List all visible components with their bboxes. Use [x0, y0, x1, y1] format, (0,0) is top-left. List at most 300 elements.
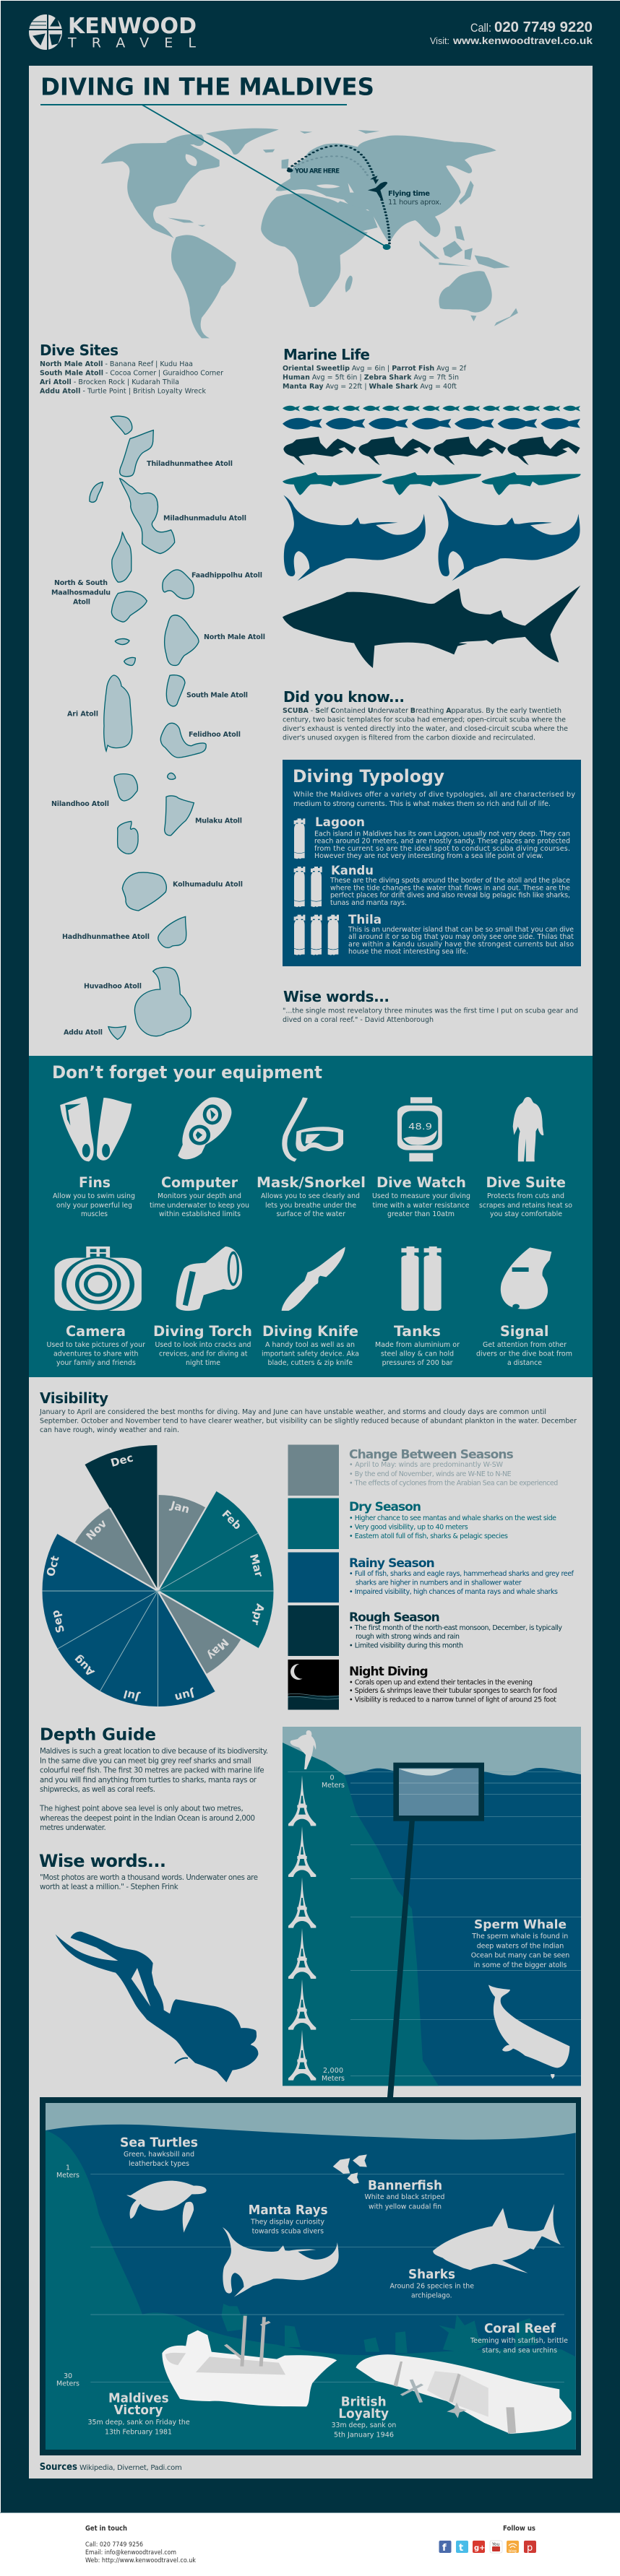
footer contact: Web: http://www.kenwoodtravel.co.uk — [85, 2557, 196, 2564]
map land masses — [101, 129, 518, 338]
label: bannerfish — [364, 2178, 445, 2211]
marine life size list — [283, 365, 467, 391]
legend: rough season — [288, 1605, 562, 1656]
footer contact: Call: 020 7749 9256 — [85, 2541, 143, 2549]
icon: logo globe — [29, 14, 62, 50]
item: diving knife — [262, 1323, 359, 1367]
label: sharks: archipelago. — [411, 2292, 452, 2299]
lagoon — [314, 815, 570, 860]
month labels: Nov — [84, 1517, 110, 1543]
icon: pinterest: p — [527, 2543, 533, 2554]
item: diving knife: Diving Knife — [262, 1323, 358, 1340]
item: dive suite — [479, 1174, 572, 1218]
heading: dive sites: Dive Sites — [40, 342, 119, 359]
label: manta rays: towards scuba divers — [252, 2227, 324, 2236]
atoll labels: Felidhoo Atoll — [189, 731, 241, 739]
item: dive suite: scrapes and retains heat so — [479, 1202, 572, 1210]
icon: knife — [282, 1247, 345, 1311]
thila: all around it or so big that you may only see one side. Thilas that — [348, 933, 574, 941]
lagoon: Lagoon — [315, 815, 365, 829]
zoom window — [393, 1763, 484, 1821]
Ari atoll shape — [104, 675, 132, 751]
row: oriental sweetlip — [283, 406, 580, 412]
footer social: Follow us — [503, 2525, 535, 2533]
coral silhouettes — [221, 2304, 538, 2353]
month labels: Jul — [122, 1687, 141, 1704]
label: British Loyalty: 5th January 1946 — [334, 2431, 394, 2440]
month labels: Sep — [48, 1608, 67, 1634]
item: diving torch: Diving Torch — [153, 1323, 252, 1340]
item: signal: Get attention from other — [483, 1341, 567, 1349]
1 meter label: Meters — [56, 2172, 79, 2180]
depth guide text: shipwrecks, as well as coral reefs. — [40, 1786, 155, 1794]
month labels: Feb — [219, 1507, 244, 1532]
logo subword: TRAVEL — [67, 35, 196, 51]
dive site list — [40, 360, 223, 396]
title: DIVING IN THE MALDIVES — [40, 72, 374, 101]
pointer line to Maldives — [142, 105, 391, 250]
legend: dry season: • Higher chance to see mantas and whale sharks on the west side — [349, 1514, 556, 1522]
item: tanks: pressures of 200 bar — [382, 1359, 453, 1367]
atoll labels: South Male Atoll — [186, 692, 248, 699]
heading: did you know: Did you know... — [283, 688, 405, 706]
atoll labels: Huvadhoo Atoll — [84, 982, 142, 991]
label: British Loyalty: Loyalty — [338, 2406, 389, 2421]
label: coral reef: stars, and sea urchins — [482, 2347, 557, 2354]
zoom connector stem — [387, 1820, 415, 2097]
item: computer: Computer — [161, 1174, 238, 1191]
30 meters label: 30 — [64, 2372, 72, 2380]
kandu — [330, 864, 570, 907]
map label: flying time: 11 hours aprox. — [388, 199, 442, 207]
month labels: Mar — [247, 1553, 266, 1579]
icon: dive watch — [397, 1097, 442, 1161]
2000 meters label: 2,000 — [323, 2067, 343, 2075]
typology intro — [293, 791, 575, 808]
seabed slope — [283, 1743, 439, 2086]
30 meters label — [56, 2372, 79, 2388]
legend: change between seasons: • April to May: winds are predominantly W-SW — [349, 1461, 504, 1469]
item: signal: divers or the dive boat from — [476, 1350, 572, 1358]
item: camera — [46, 1323, 145, 1367]
logo wordmark: KENWOOD — [68, 14, 197, 39]
atoll labels: Mulaku Atoll — [195, 818, 242, 825]
item: mask and snorkel: Mask/Snorkel — [257, 1174, 366, 1191]
depth guide text: whereas the deepest point in the Indian Ocean is around 2,000 — [40, 1815, 255, 1823]
panel: equipment — [29, 1056, 593, 1377]
kandu: These are the diving spots around the border of the atoll and the place — [330, 877, 570, 885]
month labels: May — [204, 1636, 231, 1662]
row: zebra sharks — [283, 472, 581, 495]
item: fins: Fins — [79, 1174, 111, 1191]
legend: change between seasons — [288, 1444, 558, 1496]
quote: Attenborough — [283, 1007, 578, 1024]
pie dividers — [58, 1444, 258, 1691]
label: Maldives Victory: 35m deep, sank on Friday the — [88, 2419, 190, 2427]
depth guide text: Maldives is such a great location to dive because of its biodiversity. — [40, 1748, 268, 1756]
contact website: www.kenwoodtravel.co.uk — [452, 35, 593, 46]
did you know text: century, two basic templates for scuba had emerged; open-circuit scuba where the — [283, 716, 566, 724]
item: computer: within established limits — [159, 1210, 241, 1218]
item: tanks: Tanks — [394, 1323, 441, 1340]
quote: Frink: "Most photos are worth a thousand words. Underwater ones are — [40, 1874, 258, 1882]
item: mask and snorkel — [257, 1174, 366, 1218]
legend: night diving: Night Diving — [349, 1665, 429, 1679]
kandu: perfect places for drift dives and also reveal big pelagic fish like sharks, — [330, 891, 570, 900]
item: mask and snorkel: lets you breathe under the — [265, 1202, 356, 1210]
flight path — [288, 146, 389, 243]
item: dive suite: you stay comfortable — [490, 1210, 562, 1218]
large diver silhouette — [56, 1932, 258, 2082]
heading: wise words: Wise words... — [283, 988, 389, 1005]
bannerfish — [333, 2154, 367, 2184]
contact phone: Call: — [470, 21, 491, 35]
1 meter label: 1 — [66, 2164, 70, 2172]
thila: are within a Kandu usually have the strongest currents but also — [348, 940, 574, 949]
legend: night diving — [288, 1660, 557, 1710]
legend: rainy season: sharks are higher in numbers and in shallower water — [356, 1579, 522, 1587]
marine life size list: Oriental Sweetlip Avg = 6in | Parrot Fish Avg = 2f — [283, 365, 467, 373]
legend: change between seasons: • The effects of cyclones from the Arabian Sea can be experienced — [349, 1479, 558, 1488]
legend: night diving: • Visibility is reduced to a narrow tunnel of light of around 25 foot — [349, 1696, 556, 1704]
icon: camera — [55, 1246, 142, 1312]
label: British Loyalty: 33m deep, sank on — [332, 2421, 396, 2429]
month labels: Apr — [249, 1603, 267, 1627]
30 meters label: Meters — [56, 2380, 79, 2388]
sperm whale text — [471, 1918, 569, 1969]
label: bannerfish: with yellow caudal fin — [369, 2203, 442, 2211]
lagoon: However they are not very interesting from a sea life point of view. — [314, 852, 543, 860]
sky — [283, 1727, 581, 2086]
zero meters label: 0 — [330, 1774, 335, 1782]
eiffel towers — [288, 1775, 316, 2081]
atoll labels: Kolhumadulu Atoll — [173, 881, 243, 888]
lagoon: reach around 20 meters, and are mostly sandy. These places are protected — [314, 838, 570, 845]
title underline — [40, 104, 347, 105]
seabed — [46, 2130, 576, 2450]
label: sharks — [390, 2267, 474, 2299]
label: manta rays: They display curiosity — [250, 2219, 324, 2226]
visibility text: September. October and November tend to have clearer weather, but visibility can be slightly reduced because of abundant plankton in the water. December — [40, 1417, 577, 1426]
legend: dry season: • Very good visibility, up to 40 meters — [349, 1524, 468, 1531]
did you know text — [283, 707, 568, 742]
icon: torch — [176, 1246, 242, 1311]
sperm whale text: Sperm Whale — [474, 1918, 567, 1933]
scale lines — [90, 2174, 564, 2382]
icon: facebook: f — [442, 2543, 447, 2554]
panel: diving typology — [283, 760, 581, 966]
atoll labels: North & South — [54, 579, 108, 587]
label: British Loyalty: British — [341, 2395, 387, 2410]
kandu: Kandu — [331, 864, 374, 877]
footer contact: Get in touch — [85, 2525, 127, 2533]
item: signal: Signal — [500, 1323, 549, 1340]
quote: Attenborough: dived on a coral reef." - David Attenborough — [283, 1016, 434, 1024]
header — [29, 14, 593, 51]
label: sea turtles — [120, 2135, 198, 2168]
atoll shapes south — [108, 723, 206, 1039]
item: diving torch: night time — [186, 1359, 220, 1367]
item: dive watch: Dive Watch — [376, 1174, 466, 1191]
footer — [0, 2512, 620, 2564]
dive site list: Ari Atoll - Brocken Rock | Kudarah Thila — [40, 378, 179, 386]
legend: dry season — [288, 1498, 556, 1549]
item: diving torch: Used to look into cracks and — [155, 1341, 251, 1349]
icon: tanks — [401, 1246, 442, 1311]
depth guide text: In the same dive you can meet big grey reef sharks and small — [40, 1758, 251, 1765]
item: dive watch — [372, 1174, 470, 1218]
1 meter label — [56, 2164, 79, 2180]
depth guide text: colourful reef fish. The first 30 metres are packed with marine life — [40, 1766, 264, 1775]
month labels: Dec — [109, 1451, 134, 1470]
map label: flying time: Flying time — [388, 190, 430, 198]
sperm whale — [488, 1985, 569, 2068]
2000 meters label — [322, 2067, 345, 2083]
wreck: Maldives Victory — [162, 2316, 337, 2406]
label: British Loyalty — [332, 2395, 396, 2440]
visibility text: can have rough, windy weather and rain. — [40, 1426, 179, 1434]
manta ray silhouette — [223, 2227, 339, 2297]
label: Maldives Victory: Victory — [114, 2403, 163, 2418]
label: coral reef — [470, 2321, 568, 2354]
world map — [101, 105, 518, 338]
heading: visibility: Visibility — [40, 1389, 108, 1407]
depth guide text — [39, 1748, 268, 1832]
label: manta rays — [249, 2203, 328, 2236]
row: parrot fish — [283, 418, 580, 430]
map label: flying time — [388, 190, 442, 207]
item: signal: a distance — [507, 1359, 542, 1367]
legend: rough season: • Limited visibility during this month — [349, 1642, 463, 1649]
month labels: Jun — [173, 1686, 197, 1704]
depth guide text: metres underwater. — [40, 1824, 106, 1832]
inland seas — [186, 154, 354, 193]
label: Maldives Victory: Maldives — [108, 2391, 169, 2406]
sperm whale text: deep waters of the Indian — [477, 1943, 564, 1950]
visibility text: January to April are considered the best months for diving. May and June can have unstable weather, and storms and cloudy days are common until — [39, 1408, 546, 1416]
atoll labels: Maalhosmadulu — [51, 589, 111, 597]
map label: you are here: YOU ARE HERE — [294, 168, 340, 175]
legend: rainy season: • Full of fish, sharks and eagle rays, hammerhead sharks and grey reef — [349, 1570, 574, 1578]
2000 meters label: Meters — [322, 2075, 345, 2083]
atoll labels: Ari Atoll — [67, 711, 98, 718]
item: dive suite: Dive Suite — [486, 1174, 566, 1191]
lagoon: from the current so are the ideal spot to conduct scuba diving courses. — [314, 845, 570, 853]
thila: This is an underwater island that can be so small that you can dive — [348, 926, 574, 934]
label: manta rays: Manta Rays — [249, 2203, 328, 2218]
heading: marine life: Marine Life — [283, 346, 370, 363]
pie sectors — [42, 1445, 273, 1707]
icon: wetsuit — [513, 1097, 543, 1161]
atoll labels — [51, 460, 265, 1037]
item: computer: time underwater to keep you — [150, 1202, 249, 1210]
label: coral reef: Coral Reef — [484, 2321, 556, 2336]
dive site list: Addu Atoll - Turtle Point | British Loyalty Wreck — [40, 387, 206, 396]
human height silhouette — [290, 1730, 316, 1769]
footer contact: Email: info@kenwoodtravel.com — [85, 2549, 176, 2557]
legend: change between seasons: • By the end of November, winds are W-NE to N-NE — [349, 1470, 512, 1478]
whale shark — [283, 586, 580, 668]
item: fins: muscles — [81, 1210, 108, 1218]
item: signal — [476, 1323, 572, 1367]
legend: night diving: • Spiders & shrimps leave their tubular sponges to search for food — [349, 1687, 557, 1695]
zero meters label: Meters — [322, 1782, 345, 1790]
month labels — [44, 1451, 267, 1704]
quote: Frink — [40, 1874, 258, 1891]
legend: dry season: • Eastern atoll full of fish, sharks & pelagic species — [349, 1532, 508, 1540]
label: Maldives Victory — [88, 2391, 190, 2437]
item: tanks: steel alloy & can hold — [381, 1350, 454, 1358]
item: dive suite: Protects from cuts and — [487, 1192, 564, 1200]
legend: night diving: • Corals open up and extend their tentacles in the evening — [349, 1678, 533, 1687]
sources: Wikipedia, Divernet, Padi.com — [79, 2464, 182, 2472]
dive site list: North Male Atoll - Banana Reef | Kudu Haa — [40, 360, 193, 368]
contact website: Visit: — [430, 35, 449, 46]
kandu: tunas and manta rays. — [330, 899, 407, 907]
contact phone: 020 7749 9220 — [494, 19, 593, 35]
visibility text — [39, 1408, 577, 1434]
icon: google plus: g+ — [474, 2544, 486, 2552]
label: coral reef: Teeming with starfish, brittle — [470, 2337, 568, 2345]
map location dot UK — [287, 168, 293, 173]
item: diving knife: A handy tool as well as an — [265, 1341, 355, 1349]
depth scale lines — [288, 1771, 581, 2076]
label: sharks: Around 26 species in the — [390, 2282, 474, 2291]
sperm whale text: The sperm whale is found in — [471, 1933, 568, 1940]
sources: Sources — [40, 2462, 77, 2473]
atoll labels: North Male Atoll — [204, 633, 265, 641]
atoll shapes north — [90, 416, 199, 706]
atoll labels: Faadhippolhu Atoll — [191, 572, 262, 579]
item: diving knife: blade, cutters & zip knife — [267, 1359, 353, 1367]
legend: dry season: Dry Season — [349, 1500, 421, 1514]
ocean — [340, 1768, 581, 2086]
watch display reading: 48.9 — [408, 1122, 432, 1132]
item: fins — [53, 1174, 135, 1218]
legend: rough season: rough with strong winds and rain — [356, 1633, 460, 1641]
month labels: Jan — [168, 1499, 191, 1516]
icon: whistle — [501, 1247, 551, 1309]
item: camera: Camera — [66, 1323, 126, 1340]
icon: mask and snorkel — [285, 1098, 343, 1161]
thila: house the most interesting sea life. — [348, 947, 468, 956]
atoll labels: Hadhdhunmathee Atoll — [62, 933, 150, 941]
item: computer — [150, 1174, 249, 1218]
item: mask and snorkel: surface of the water — [276, 1210, 345, 1218]
turtle — [126, 2181, 207, 2233]
quote: Attenborough: "...the single most revelatory three minutes was the first time I put on scuba gear and — [283, 1007, 578, 1015]
depth guide text: The highest point above sea level is only about two metres, — [39, 1805, 244, 1813]
item: diving torch — [153, 1323, 252, 1367]
item: fins: Allow you to swim using — [53, 1192, 135, 1200]
label: sea turtles: Sea Turtles — [120, 2135, 198, 2151]
label: sharks: Sharks — [408, 2267, 455, 2282]
month labels: Aug — [71, 1652, 98, 1679]
sources — [40, 2462, 182, 2473]
item: fins: only your powerful leg — [56, 1202, 132, 1210]
icon: plane — [368, 175, 387, 201]
shallow water chart — [40, 2097, 581, 2455]
item: mask and snorkel: Allows you to see clearly and — [261, 1192, 360, 1200]
item: diving knife: important safety device. Aka — [262, 1350, 359, 1358]
marine life size list: Manta Ray Avg = 22ft | Whale Shark Avg = 40ft — [283, 383, 457, 391]
legend: rainy season — [288, 1553, 574, 1603]
item: diving torch: crevices, and for diving at — [159, 1350, 248, 1358]
icon: youtube: You — [491, 2542, 500, 2547]
lagoon: Each island in Maldives has its own Lagoon, usually not very deep. They can — [314, 831, 570, 838]
icon: twitter: t — [459, 2543, 463, 2554]
visibility pie chart — [42, 1444, 273, 1707]
typology intro: medium to strong currents. This is what makes them so rich and full of life. — [293, 800, 551, 808]
label: bannerfish: White and black striped — [364, 2193, 445, 2201]
legend: change between seasons: Change Between Seasons — [349, 1447, 514, 1462]
icon: blog: blog — [509, 2549, 517, 2554]
sperm whale text: Ocean but many can be seen — [471, 1951, 569, 1960]
sperm whale text: in some of the bigger atolls — [474, 1961, 567, 1969]
footer social — [439, 2525, 536, 2554]
sky — [46, 2103, 576, 2450]
atoll labels: Nilandhoo Atoll — [51, 800, 109, 808]
label: sea turtles: leatherback types — [129, 2160, 189, 2168]
thila: Thila — [348, 913, 382, 927]
item: dive watch: Used to measure your diving — [372, 1192, 470, 1200]
icon: dive computer — [178, 1097, 231, 1159]
zero meters label — [322, 1774, 345, 1790]
item: camera: adventures to share with — [53, 1350, 139, 1358]
typology intro: While the Maldives offer a variety of dive typologies, all are characterised by — [293, 791, 575, 799]
did you know text: diver's exhaust is vented directly into the water, and closed-circuit scuba where the — [283, 725, 568, 733]
equipment icons — [55, 1096, 551, 1312]
month labels: Oct — [44, 1554, 62, 1578]
item: dive watch: greater than 10atm — [387, 1210, 455, 1218]
label: sea turtles: Green, hawksbill and — [124, 2151, 194, 2159]
typology heading: Diving Typology — [293, 766, 444, 786]
night swatch with moon — [288, 1660, 339, 1710]
legend: rainy season: • Impaired visibility, high chances of manta rays and whale sharks — [349, 1588, 558, 1596]
atoll labels: Thiladhunmathee Atoll — [147, 460, 233, 468]
legend: rough season: Rough Season — [349, 1610, 440, 1625]
atoll labels: Atoll — [73, 598, 90, 607]
depth chart — [283, 1727, 581, 2097]
heading: depth guide: Depth Guide — [40, 1726, 156, 1745]
shark — [433, 2204, 561, 2273]
heading: wise words 2: Wise words... — [39, 1851, 166, 1871]
legend: rough season: • The first month of the north-east monsoon, December, is typically — [349, 1624, 562, 1632]
thila — [348, 913, 574, 956]
water — [46, 2125, 576, 2450]
kandu: where the tide changes the water that flows in and out. These are the — [330, 884, 570, 893]
label: Maldives Victory: 13th February 1981 — [105, 2428, 172, 2437]
item: dive watch: time with a water resistance — [373, 1202, 470, 1210]
item: computer: Monitors your depth and — [158, 1192, 241, 1200]
marine life size list: Human Avg = 5ft 6in | Zebra Shark Avg = 7ft 5in — [283, 374, 459, 382]
equipment heading: Don’t forget your equipment — [52, 1062, 322, 1083]
atoll labels: Miladhunmadulu Atoll — [163, 514, 246, 523]
legend: rainy season: Rainy Season — [349, 1556, 435, 1571]
atoll labels: Addu Atoll — [64, 1028, 103, 1037]
logo — [29, 14, 197, 51]
label: bannerfish: Bannerfish — [368, 2178, 442, 2193]
atoll map — [51, 416, 265, 1039]
item: camera: your family and friends — [56, 1359, 136, 1367]
icon: fins — [60, 1096, 132, 1161]
row: human divers — [283, 437, 580, 465]
item: tanks — [375, 1323, 460, 1367]
chart frame — [40, 2097, 581, 2455]
depth guide text: and you will find anything from turtles to sharks, manta rays or — [40, 1777, 257, 1784]
item: camera: Used to take pictures of your — [46, 1341, 145, 1349]
did you know text: diver's unused oxygen is filtered from the carbon dioxide and recirculated. — [283, 734, 535, 742]
